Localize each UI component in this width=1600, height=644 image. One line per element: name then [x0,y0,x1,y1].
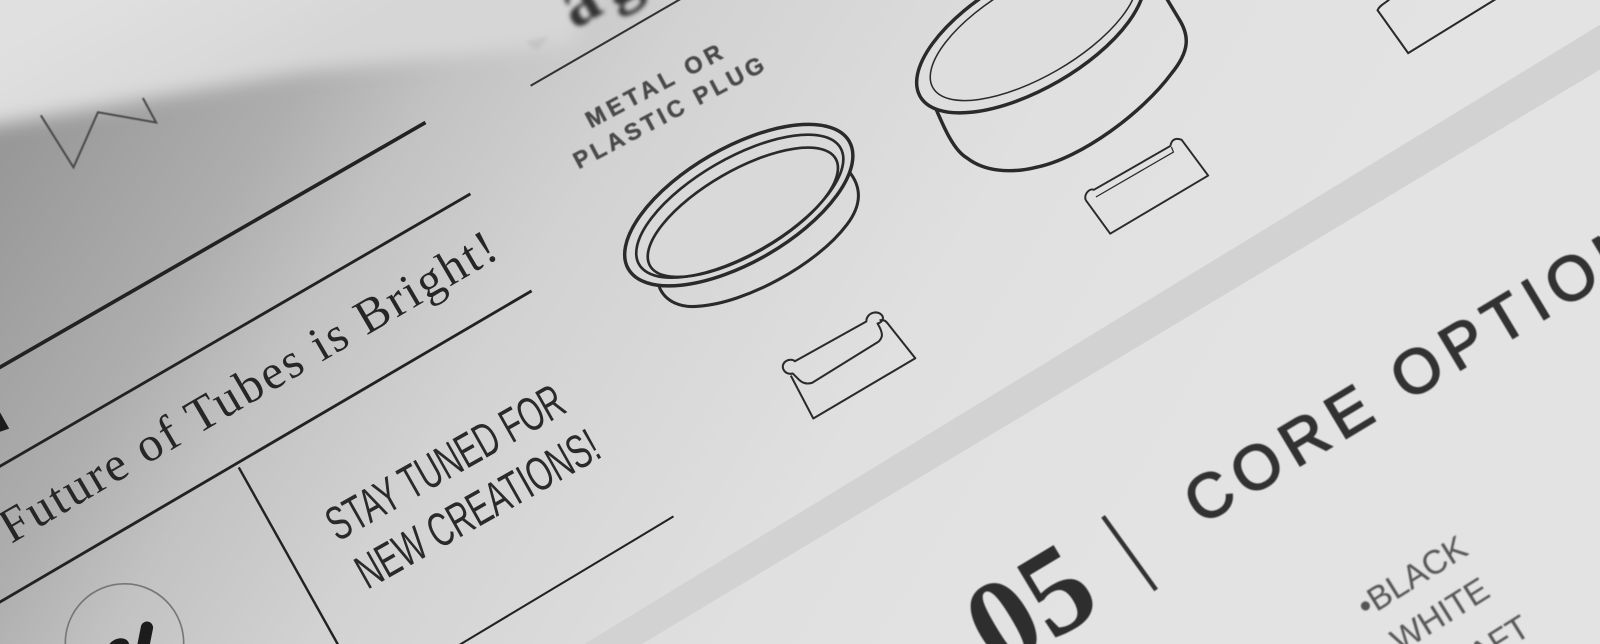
tagline: Future of Tubes is Bright! [0,219,506,553]
rule: lower right of callout [459,516,673,644]
heading divider [1103,516,1156,590]
background: out-of-focus foreground sheet [0,0,612,131]
rule: cell divider [239,467,339,644]
label: metal or plastic plug: PLASTIC PLUG [569,51,768,174]
rule: tagline lower [0,291,532,603]
icon: plug clip left [783,312,915,418]
icon: plug ring [600,92,878,318]
list: core colours: •BLACK [1351,529,1475,625]
icon: third clip partly cropped [1378,0,1496,53]
callout: stay tuned [317,375,609,599]
label: metal or plastic plug: METAL OR [581,39,727,133]
list: core colours [1351,529,1537,644]
rule: top band lower [0,194,470,467]
icon: cap clip [1085,139,1208,234]
rule: top band upper [0,122,426,368]
icon: zigzag mark [41,98,156,167]
callout: stay tuned: STAY TUNED FOR [317,375,574,552]
icon: cap [892,0,1186,171]
section divider band [569,20,1600,644]
rule above plug label [531,0,681,86]
icon: small black triangle [0,412,9,432]
logo badge [65,584,184,644]
callout: stay tuned: NEW CREATIONS! [347,420,609,599]
